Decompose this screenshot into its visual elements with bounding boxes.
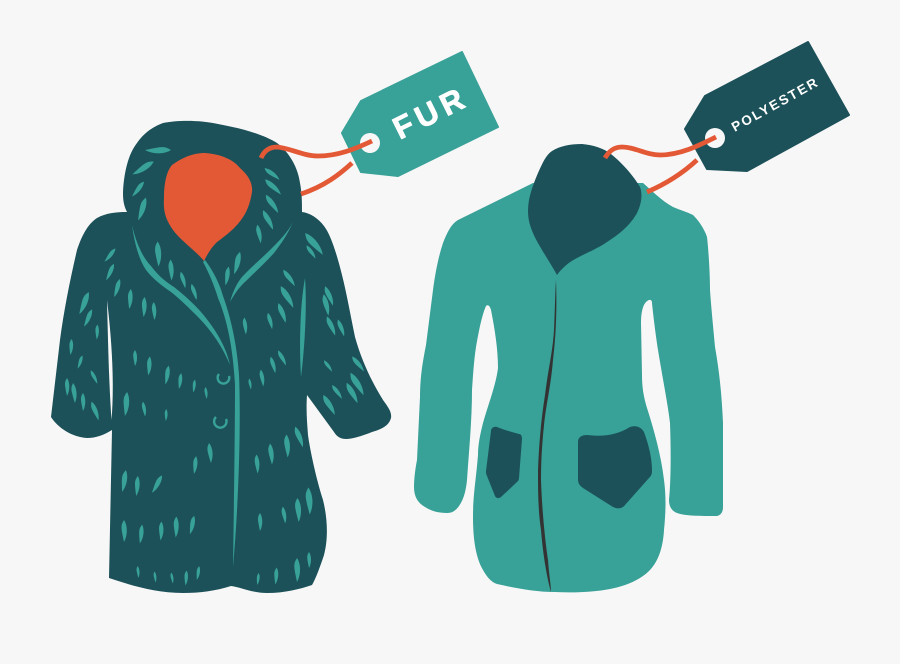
lapel and seam lines — [132, 222, 306, 567]
label: FUR: FUR — [387, 79, 475, 146]
string: polyester tag — [605, 137, 716, 192]
string: fur tag — [261, 141, 372, 194]
polyester coat — [414, 144, 723, 592]
left pocket — [486, 427, 522, 498]
tag: polyester — [685, 42, 849, 171]
fur tufts — [65, 147, 366, 586]
tag: fur — [342, 52, 498, 176]
tag shape: polyester — [685, 42, 849, 171]
face opening — [164, 153, 252, 261]
hood — [528, 144, 641, 275]
zipper — [538, 280, 556, 592]
label: POLYESTER: POLYESTER — [729, 74, 822, 135]
fur coat — [51, 121, 391, 593]
buttons — [214, 374, 229, 428]
coat body: polyester — [414, 183, 723, 592]
hole: polyester — [705, 128, 725, 148]
hole: fur — [360, 133, 380, 153]
right pocket — [578, 426, 652, 508]
sleeve gap — [107, 300, 113, 420]
tag shape: fur — [342, 52, 498, 176]
coat body: fur — [51, 121, 391, 593]
